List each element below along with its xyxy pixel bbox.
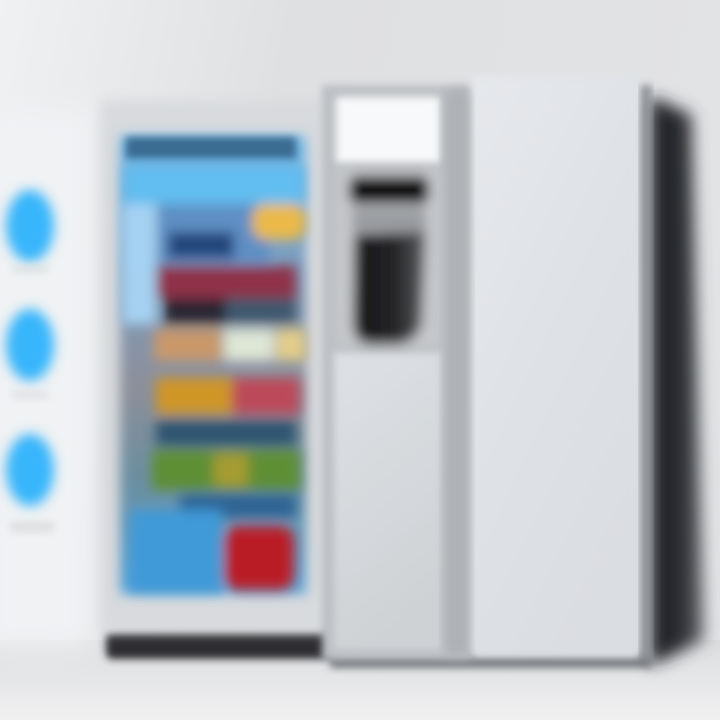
- icon: blue circle top: [6, 190, 54, 262]
- caption placeholders: [10, 266, 54, 532]
- edge between right door and side: [641, 85, 651, 660]
- fridge center column: [322, 85, 472, 660]
- left door frame: [100, 100, 328, 632]
- fridge bottom base: [106, 632, 652, 668]
- icon: blue circle bottom: [6, 434, 54, 506]
- right door: [472, 76, 640, 658]
- screen rows: [122, 166, 306, 592]
- icon: blue circle middle: [6, 309, 54, 381]
- fridge shadow side: [650, 96, 704, 666]
- door gap: [446, 90, 468, 655]
- top panel white: [336, 97, 440, 163]
- screen: [120, 136, 306, 594]
- dispenser: [336, 168, 442, 348]
- screen header: [126, 137, 296, 159]
- lower center door: [334, 352, 442, 650]
